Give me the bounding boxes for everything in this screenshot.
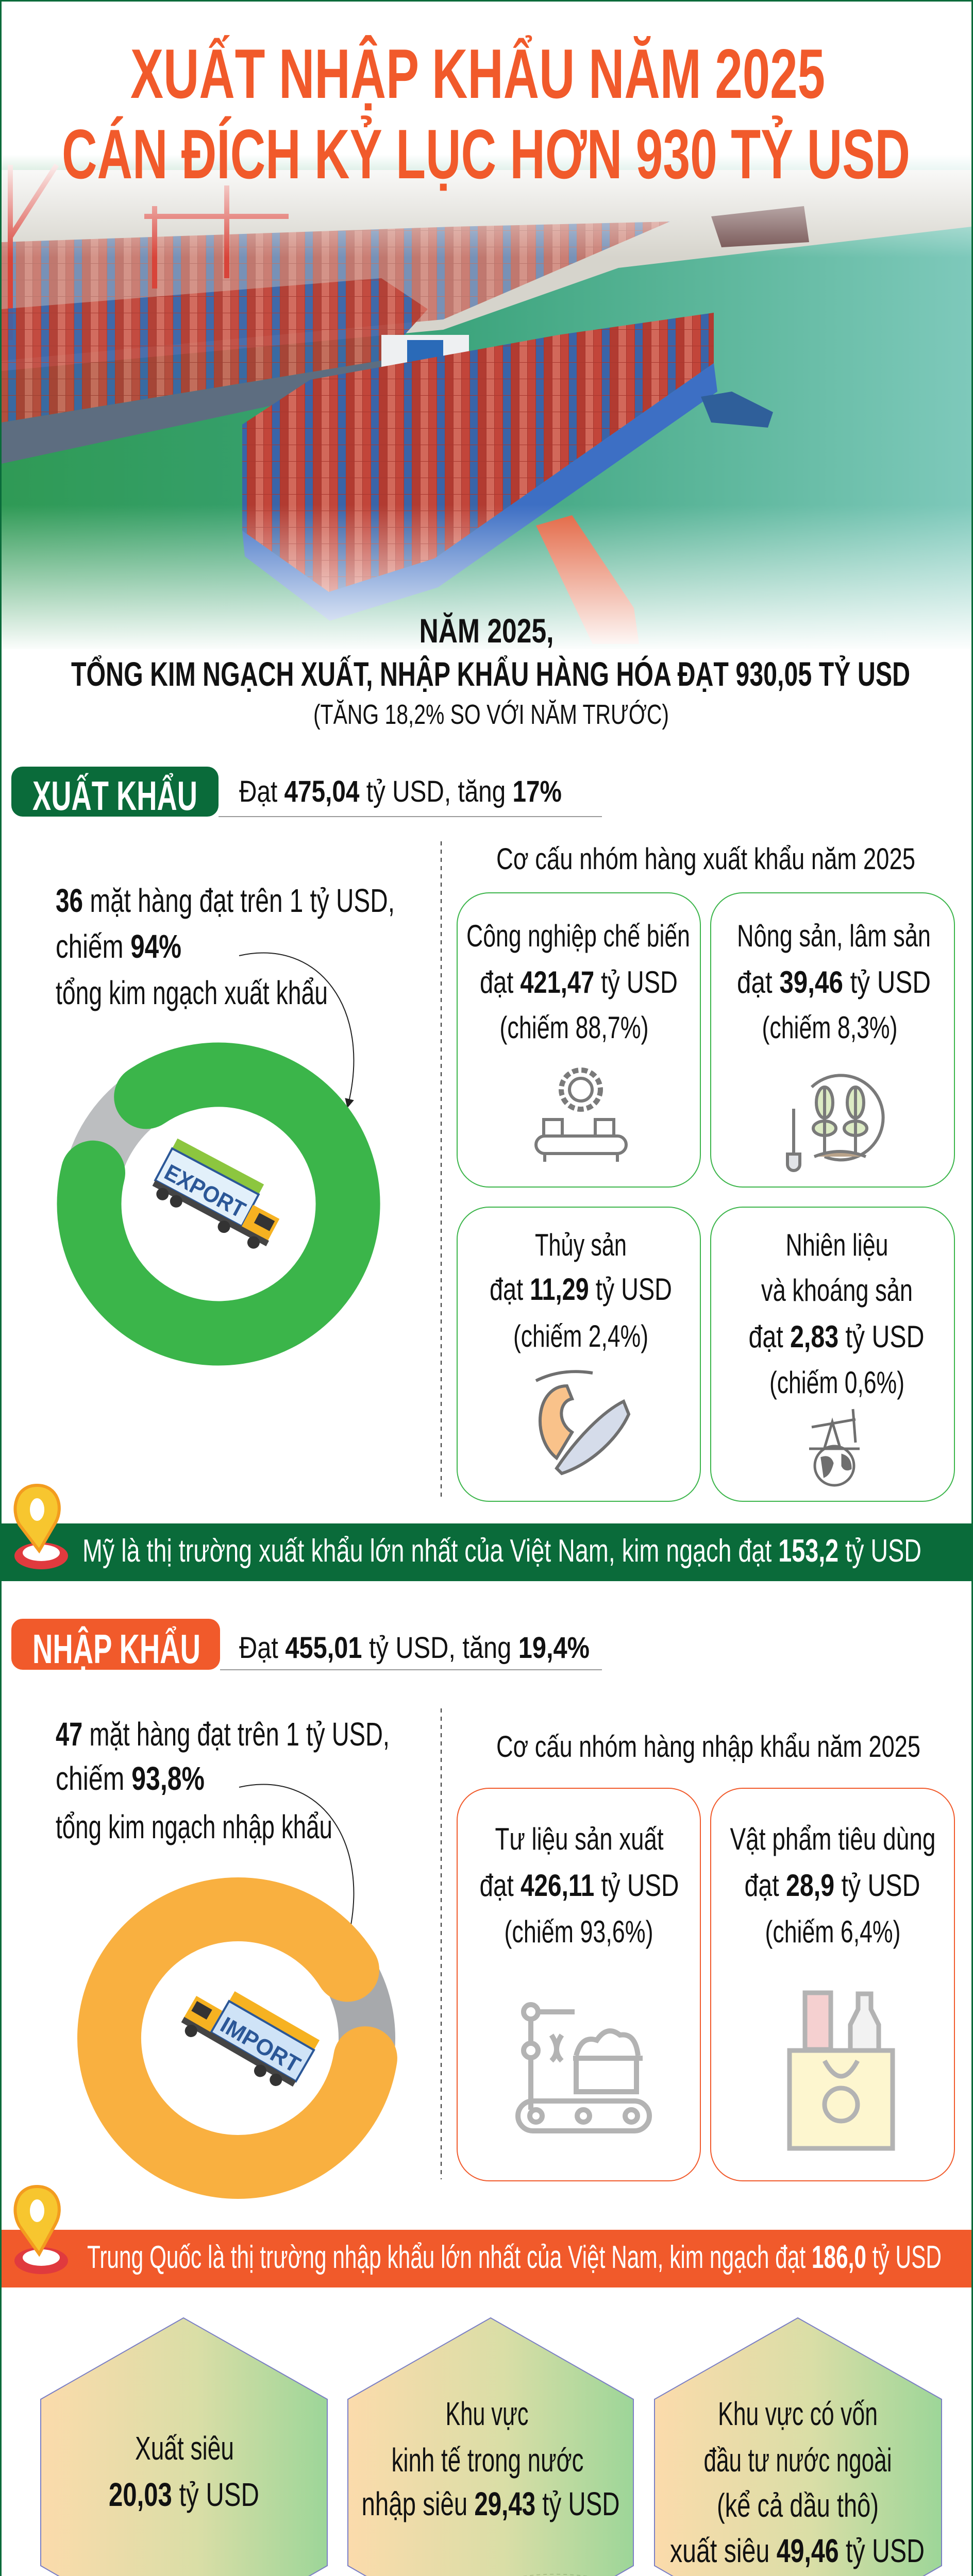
hexagon: khu vực kinh tế trong nước: Khu vực — [445, 2395, 529, 2432]
hexagon: khu vực FDI: Khu vực có vốn — [718, 2395, 878, 2432]
icon: shrimp and fish — [536, 1371, 629, 1473]
icon: plants — [787, 1075, 883, 1171]
card: công nghiệp chế biến — [457, 893, 700, 1187]
card: thủy sản — [457, 1207, 700, 1501]
card: vật phẩm tiêu dùng: (chiếm 6,4%) — [765, 1914, 901, 1949]
card: nhiên liệu: (chiếm 0,6%) — [769, 1365, 904, 1400]
hexagon: khu vực FDI: xuất siêu 49,46 tỷ USD — [670, 2532, 925, 2569]
donut import — [109, 1909, 367, 2167]
card: công nghiệp chế biến: Công nghiệp chế biến — [466, 919, 690, 953]
card: vật phẩm tiêu dùng — [711, 1788, 954, 2181]
export left text: tổng kim ngạch xuất khẩu — [56, 974, 328, 1011]
import header: NHẬP KHẨU — [32, 1626, 200, 1672]
import left text — [56, 1716, 390, 1845]
icon: export truck — [148, 1139, 291, 1254]
card: nhiên liệu: Nhiên liệu — [785, 1228, 888, 1262]
card: nhiên liệu — [711, 1207, 954, 1501]
icon: robot arm and cart — [518, 2005, 649, 2131]
hero photo: port and container ships — [2, 155, 971, 652]
icon: shopping bag — [790, 1993, 893, 2148]
export left text: chiếm 94% — [56, 928, 181, 965]
arrow export — [239, 953, 354, 1104]
card: nông sản, lâm sản: (chiếm 8,3%) — [762, 1010, 898, 1045]
title — [62, 35, 910, 193]
donut export — [89, 1075, 348, 1333]
headline summary: (TĂNG 18,2% SO VỚI NĂM TRƯỚC) — [313, 699, 669, 730]
icon: gear conveyor — [536, 1070, 626, 1162]
card: nhiên liệu: và khoáng sản — [761, 1273, 913, 1308]
card: công nghiệp chế biến: (chiếm 88,7%) — [500, 1010, 648, 1045]
card: vật phẩm tiêu dùng: đạt 28,9 tỷ USD — [744, 1868, 920, 1903]
card: tư liệu sản xuất — [457, 1788, 700, 2181]
banner: US largest export market: Mỹ là thị trường xuất khẩu lớn nhất của Việt Nam, kim ngạch đạt 153,2 tỷ USD — [82, 1533, 921, 1569]
card: nông sản, lâm sản — [711, 893, 954, 1187]
hexagon: khu vực kinh tế trong nước: nhập siêu 29,43 tỷ USD — [362, 2485, 619, 2522]
hexagon: khu vực FDI — [655, 2318, 942, 2576]
icon: oil pump globe — [809, 1409, 860, 1485]
export header: Đạt 475,04 tỷ USD, tăng 17% — [239, 775, 562, 808]
hexagon: khu vực kinh tế trong nước — [348, 2318, 633, 2576]
import left text: tổng kim ngạch nhập khẩu — [56, 1808, 332, 1845]
card: tư liệu sản xuất: Tư liệu sản xuất — [495, 1822, 664, 1856]
card: tư liệu sản xuất: đạt 426,11 tỷ USD — [479, 1868, 679, 1903]
icon: import truck — [177, 1976, 320, 2094]
card: nông sản, lâm sản: đạt 39,46 tỷ USD — [737, 965, 931, 999]
card: nhiên liệu: đạt 2,83 tỷ USD — [748, 1319, 925, 1354]
icon: location pin import — [14, 2187, 68, 2274]
banner: China largest import market — [2, 2230, 971, 2287]
hexagon: khu vực FDI: (kể cả dầu thô) — [717, 2487, 879, 2524]
card: thủy sản: (chiếm 2,4%) — [513, 1319, 648, 1353]
import header: Đạt 455,01 tỷ USD, tăng 19,4% — [239, 1631, 590, 1665]
hexagon: khu vực FDI: đầu tư nước ngoài — [704, 2442, 892, 2479]
hexagon: xuất siêu — [41, 2318, 327, 2576]
icon: location pin export — [14, 1485, 68, 1569]
card: tư liệu sản xuất: (chiếm 93,6%) — [504, 1914, 653, 1949]
icon: export truck: EXPORT — [160, 1160, 249, 1223]
import left text: 47 mặt hàng đạt trên 1 tỷ USD, — [56, 1716, 390, 1753]
hexagon: xuất siêu: Xuất siêu — [135, 2430, 234, 2467]
export header — [11, 767, 602, 819]
icon: import truck: IMPORT — [216, 2012, 305, 2078]
import header — [11, 1619, 602, 1672]
arrow import — [239, 1785, 354, 1937]
headline summary: NĂM 2025, — [420, 612, 553, 650]
hexagon: xuất siêu: 20,03 tỷ USD — [109, 2476, 259, 2513]
hexagon: khu vực kinh tế trong nước: kinh tế trong nước — [392, 2442, 583, 2479]
card: thủy sản: đạt 11,29 tỷ USD — [490, 1272, 672, 1307]
banner: US largest export market — [2, 1523, 971, 1581]
world map with trade routes — [43, 2574, 934, 2576]
export left text: 36 mặt hàng đạt trên 1 tỷ USD, — [56, 882, 395, 919]
export left text — [56, 882, 395, 1011]
export header: XUẤT KHẨU — [32, 773, 197, 819]
headline summary — [71, 612, 910, 730]
import left text: chiếm 93,8% — [56, 1760, 205, 1797]
card: thủy sản: Thủy sản — [535, 1228, 627, 1262]
card: công nghiệp chế biến: đạt 421,47 tỷ USD — [480, 965, 678, 999]
